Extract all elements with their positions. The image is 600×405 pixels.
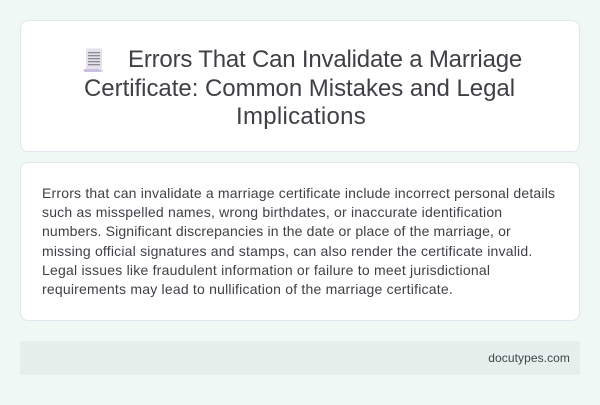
text block: description: requirements may lead to nullification of the marriage certificate. [42,281,453,297]
text block: description: Legal issues like fraudulent information or failure to meet jurisdictional [42,262,490,278]
text block: description: missing official signatures and stamps, can also render the certificate invalid. [42,243,532,259]
icon: scroll document [84,48,103,72]
text block: description: such as misspelled names, wrong birthdates, or inaccurate identification [42,204,502,220]
text block: description: Errors that can invalidate a marriage certificate include incorrect personal details [42,185,555,201]
footer bar [20,341,580,375]
panel: description card [20,162,580,321]
text block: description: numbers. Significant discrepancies in the date or place of the marriage, or [42,223,511,239]
title [84,46,522,130]
title: Certificate: Common Mistakes and Legal [84,75,515,102]
panel: title card [20,20,580,152]
title: Errors That Can Invalidate a Marriage [128,46,522,73]
text block: description [42,185,555,297]
footer text: source: docutypes.com [488,351,570,365]
title: Implications [236,103,366,130]
